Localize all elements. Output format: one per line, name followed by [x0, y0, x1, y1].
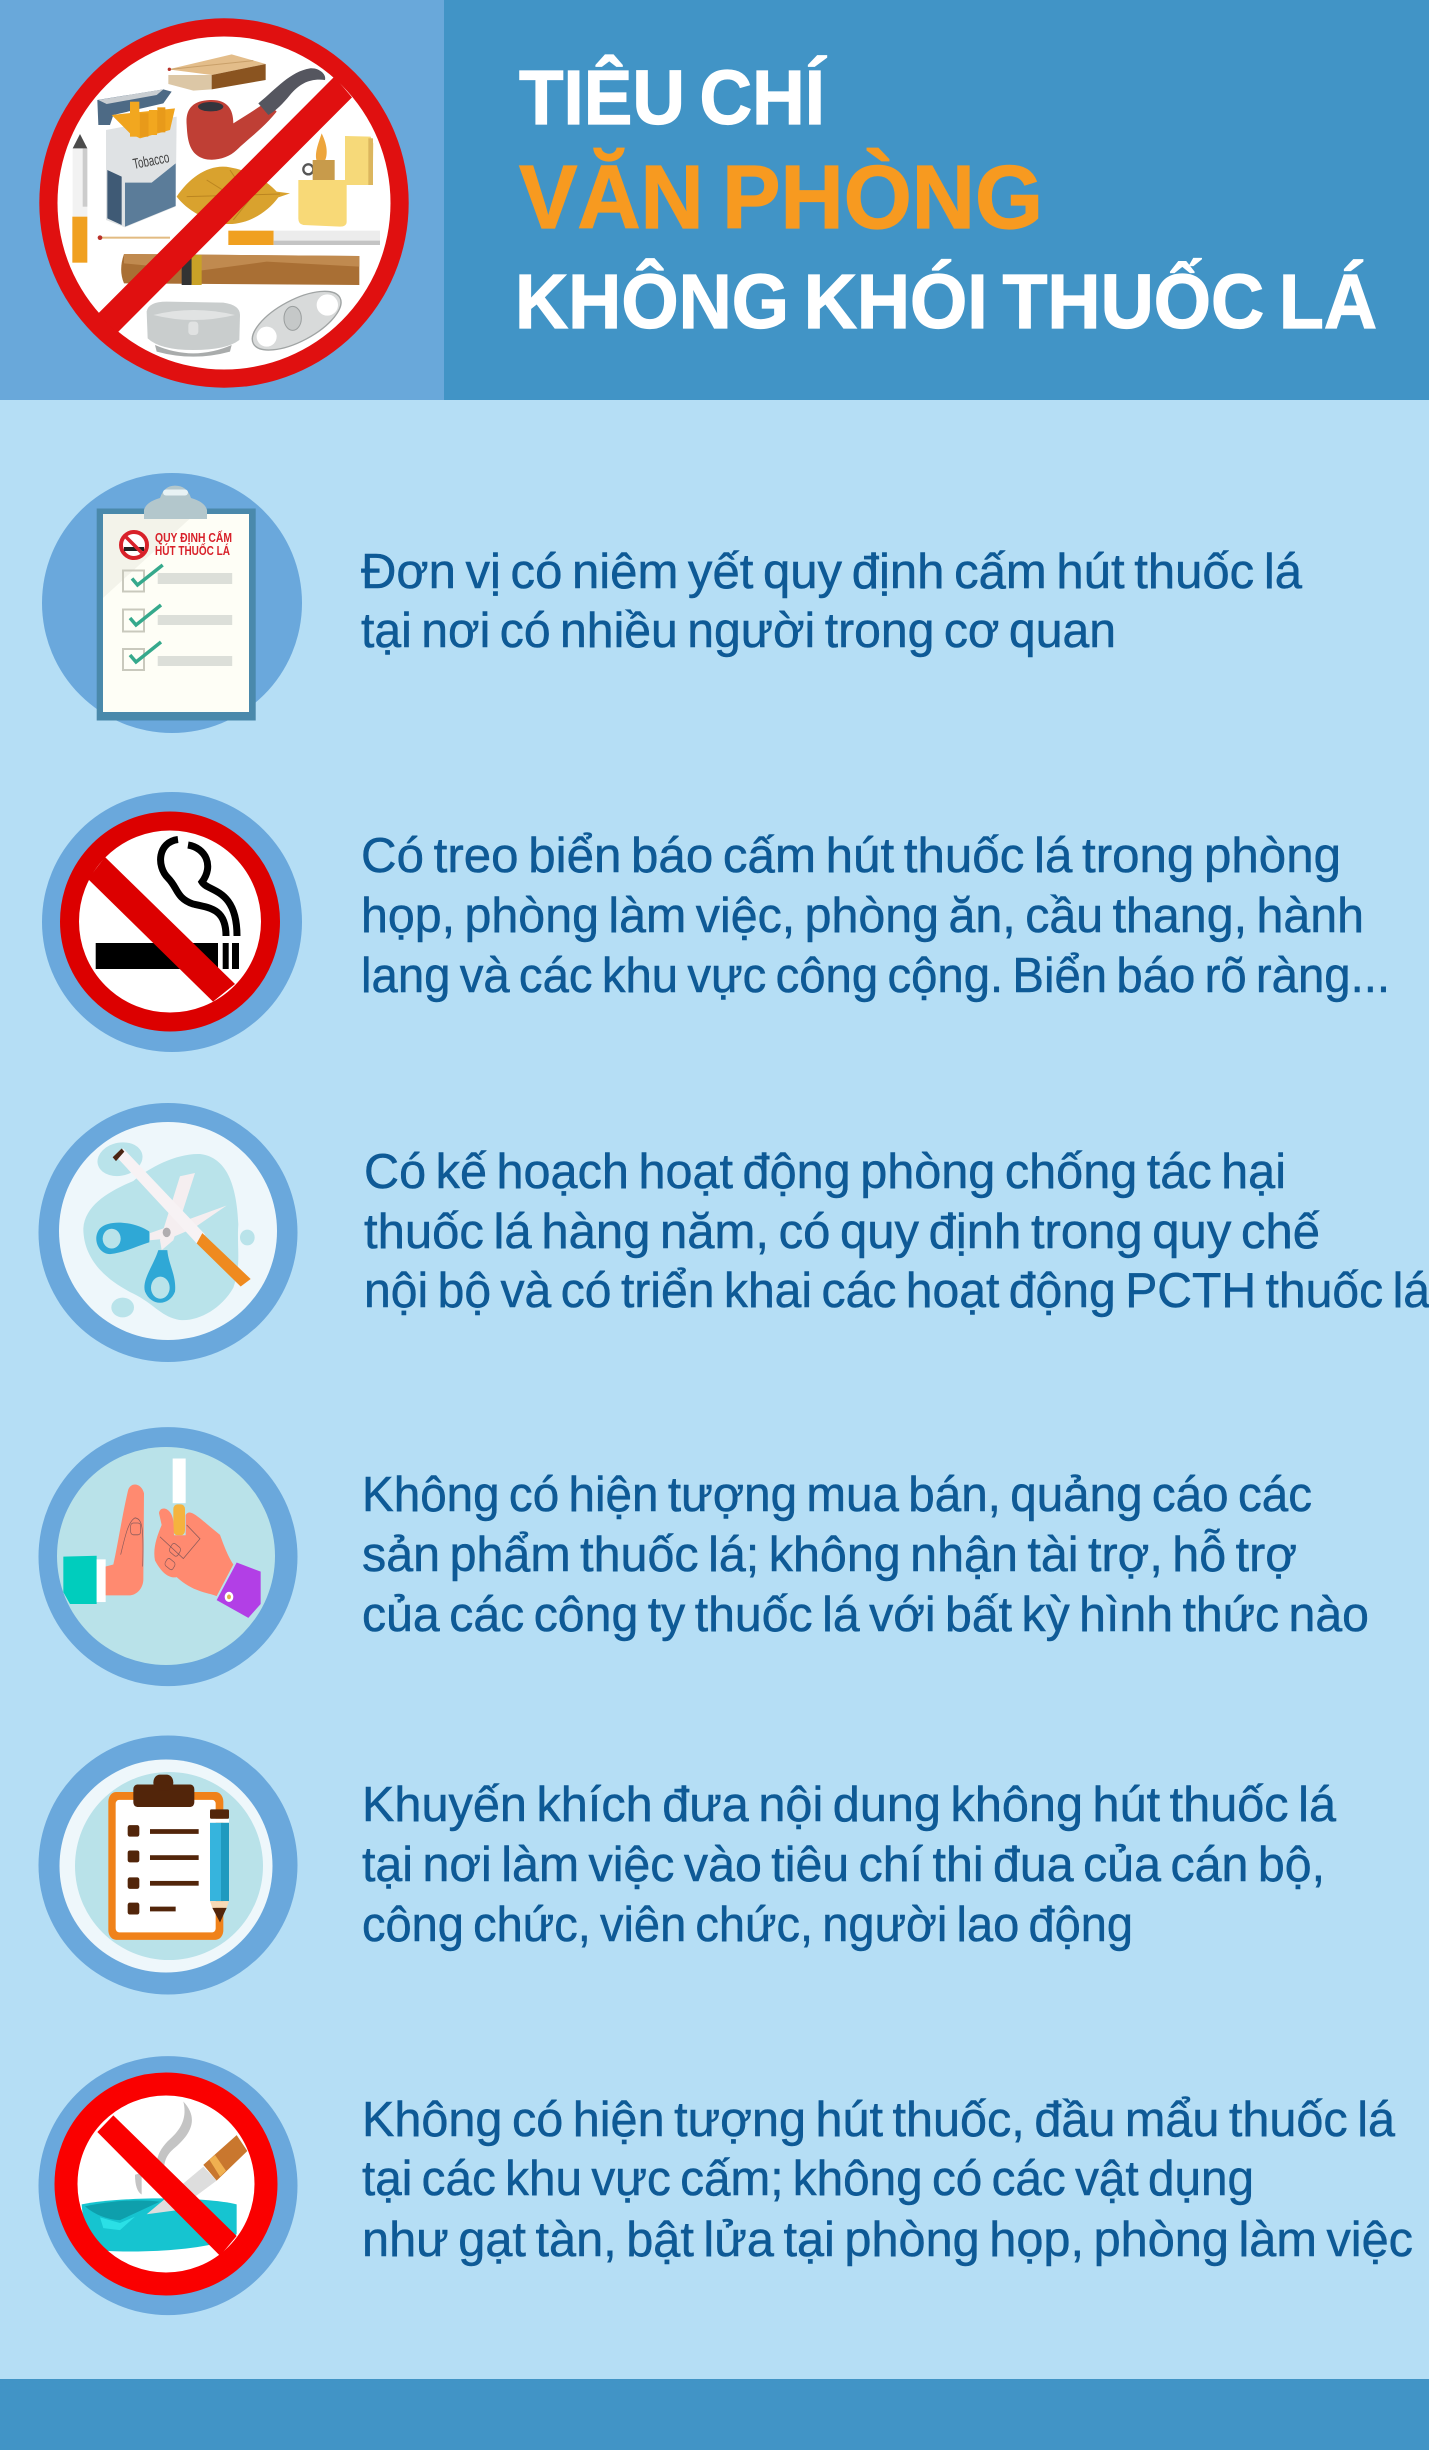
- ashtray: [147, 302, 240, 357]
- match stick: [98, 235, 170, 240]
- lighter: [298, 133, 373, 227]
- slash: [97, 2115, 237, 2256]
- title line 3: KHÔNG KHÓI THUỐC LÁ: [515, 258, 1377, 345]
- cigarette pack: [97, 89, 177, 227]
- icon 3: scissors cutting cigarette: [38, 1103, 298, 1362]
- title: [515, 54, 1377, 345]
- pipe: [186, 68, 325, 160]
- text block 5: Khuyến khích đưa nội dung không hút thuốc lá: [362, 1778, 1337, 1832]
- matchbox: [168, 54, 266, 91]
- panel: header: [0, 0, 1429, 400]
- regulation label: [155, 530, 232, 558]
- icon 2: no smoking sign: [42, 792, 302, 1052]
- hand holding cigarette: [154, 1459, 261, 1618]
- text block 6: Không có hiện tượng hút thuốc, đầu mẩu thuốc lá: [362, 2093, 1396, 2147]
- text block 1: tại nơi có nhiều người trong cơ quan: [361, 604, 1116, 658]
- text block 2: lang và các khu vực công cộng. Biển báo rõ ràng...: [361, 949, 1390, 1003]
- icon: prohibited tobacco products: [39, 18, 409, 388]
- cigar cutter: [244, 279, 350, 362]
- regulation label: QUY ĐỊNH CẤM: [155, 530, 232, 545]
- checklist: [123, 565, 232, 670]
- text block 2: [361, 829, 1390, 1003]
- ashtray: [82, 2198, 237, 2252]
- cigarette right: [228, 231, 380, 245]
- text block 1: [361, 545, 1303, 658]
- smoke: [161, 840, 226, 936]
- text block 6: [362, 2093, 1413, 2267]
- prohibition slash: [98, 77, 352, 333]
- text block 4: của các công ty thuốc lá với bất kỳ hình thức nào: [362, 1588, 1369, 1642]
- text block 5: [362, 1778, 1337, 1952]
- icon 6: no ashtray: [38, 2056, 298, 2315]
- title line 1: TIÊU CHÍ: [519, 54, 827, 141]
- text block 1: Đơn vị có niêm yết quy định cấm hút thuốc lá: [361, 545, 1303, 599]
- text block 6: tại các khu vực cấm; không có các vật dụng: [362, 2152, 1254, 2206]
- text block 2: Có treo biển báo cấm hút thuốc lá trong phòng: [361, 829, 1341, 883]
- text block 3: Có kế hoạch hoạt động phòng chống tác hại: [364, 1145, 1286, 1199]
- refusing hand: [63, 1484, 144, 1604]
- cigarette: [115, 1149, 205, 1243]
- icon 1: regulation clipboard: [42, 473, 302, 733]
- footer bar: [0, 2379, 1429, 2450]
- text block 5: tại nơi làm việc vào tiêu chí thi đua của cán bộ,: [362, 1838, 1325, 1892]
- cigar: [121, 254, 359, 285]
- text block 3: thuốc lá hàng năm, có quy định trong quy chế: [364, 1205, 1320, 1259]
- tobacco leaf: [177, 167, 290, 224]
- smoke: [156, 2102, 192, 2189]
- clipboard: [108, 1792, 223, 1940]
- scissors: [150, 1205, 227, 1240]
- text block 3: [364, 1145, 1429, 1318]
- mini no-smoking sign: [121, 532, 147, 558]
- list items: [128, 1825, 199, 1915]
- title line 2: VĂN PHÒNG: [519, 147, 1043, 248]
- text block 4: sản phẩm thuốc lá; không nhận tài trợ, hỗ trợ: [362, 1528, 1297, 1582]
- cigarette: [147, 2167, 217, 2214]
- text block 3: nội bộ và có triển khai các hoạt động PCTH thuốc lá: [364, 1264, 1429, 1318]
- text block 2: họp, phòng làm việc, phòng ăn, cầu thang, hành: [361, 889, 1364, 943]
- pencil: [210, 1809, 229, 1922]
- cigarette: [96, 943, 218, 969]
- header left panel: [0, 0, 444, 400]
- cigarette left: [72, 134, 87, 263]
- text block 6: như gạt tàn, bật lửa tại phòng họp, phòng làm việc: [362, 2213, 1413, 2267]
- cigarette pack: Tobacco: [132, 150, 171, 173]
- text block 4: [362, 1468, 1369, 1642]
- text block 5: công chức, viên chức, người lao động: [362, 1898, 1133, 1952]
- slash: [88, 857, 235, 1002]
- text block 4: Không có hiện tượng mua bán, quảng cáo các: [362, 1468, 1312, 1522]
- icon 4: hand refusing cigarette: [38, 1427, 298, 1686]
- icon 5: checklist and pencil: [38, 1736, 298, 1994]
- header right panel: [444, 0, 1429, 400]
- regulation label: HÚT THUỐC LÁ: [155, 543, 230, 558]
- water blob: [83, 1154, 238, 1320]
